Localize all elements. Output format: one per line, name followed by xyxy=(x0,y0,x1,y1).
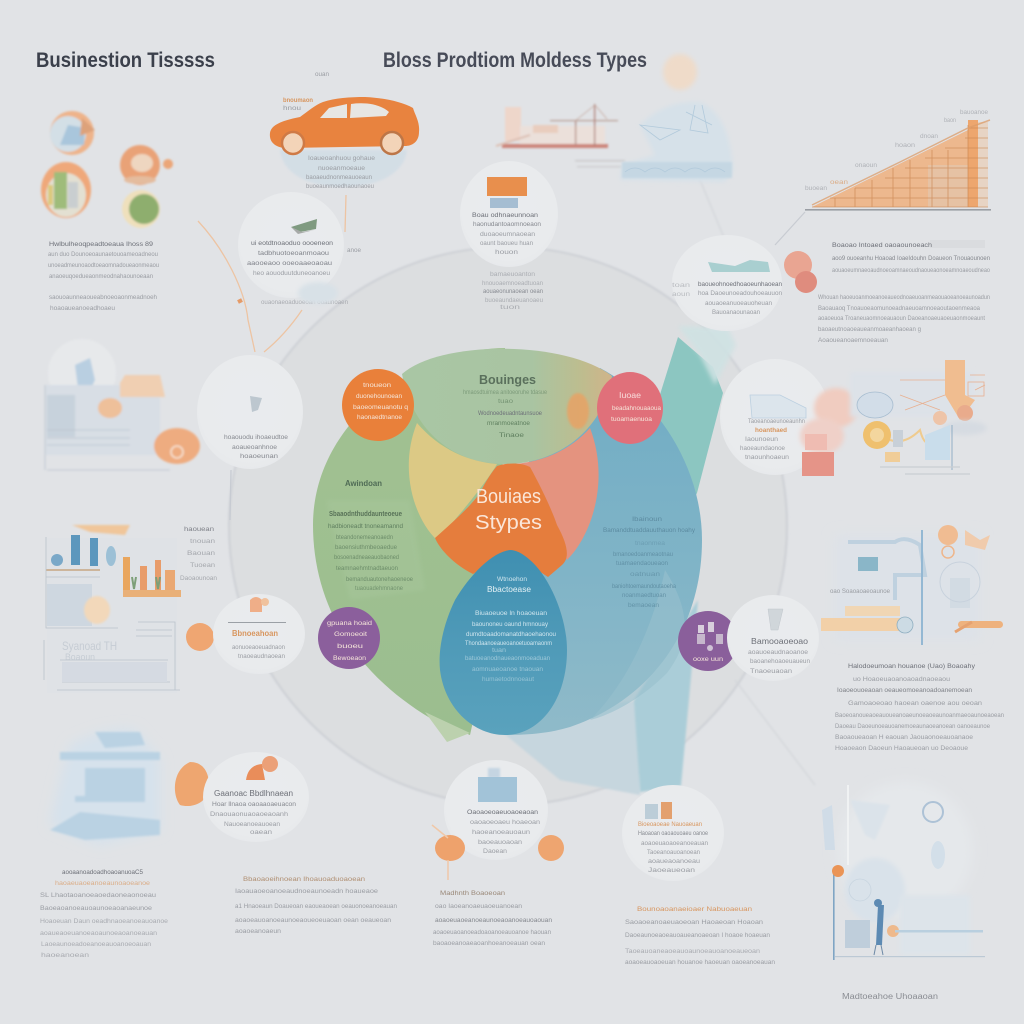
text: top right block: Whouan haoeuoanmoeanoeaueodnoaeuoanmeaouaoeanoeaunoadun xyxy=(818,294,990,301)
panel: left lower chart illustration xyxy=(44,525,217,693)
text: top lens: mranmoeatnoe xyxy=(487,420,530,427)
text: blue egg: dumdtoaadomanatdhaoehaonou xyxy=(466,631,556,638)
text: bottom centre block: Madhnth Boaoeoan xyxy=(440,890,505,897)
text: green field: bemanduautonehaoeneoe xyxy=(346,576,413,583)
bubble: green icon: ouaonaeoaduoeoan ooaunoaen xyxy=(261,299,348,306)
purple circle left: buoeu xyxy=(337,643,364,650)
panel: left lower chart illustration: Boaoun xyxy=(65,652,95,662)
bubble: bottom centre: haoeanoeauoaun xyxy=(472,829,530,836)
orange circle: baoeomeuanotu q xyxy=(353,404,408,411)
chart: top right growth chart: baon xyxy=(944,117,956,124)
panel: top left circles xyxy=(41,111,173,228)
panel: top centre blue sketch xyxy=(620,54,733,182)
purple circle left xyxy=(318,607,380,669)
bubble: top centre xyxy=(460,161,558,267)
purple circle right: ooxe uun xyxy=(693,656,723,663)
purple circle right xyxy=(678,611,738,671)
text: bottom mid-left block: aoaoeauoanoeaunoeaoueoeuaoan oean oeaueoan xyxy=(235,917,391,924)
text: bottom mid-left block: a1 Hnaoeaun Doaueoan eaoueaoean oeauonoeanoeauan xyxy=(235,903,397,910)
text: bottom right block: aoaoeauoaoeuan houanoe haoeuan oaoeanoeauan xyxy=(625,959,775,966)
bubble: green icon: aaooeaoo ooeoaaeoaoau xyxy=(247,260,332,267)
rose circle: Iuoae xyxy=(619,391,642,400)
text: top lens: tuao xyxy=(498,398,513,405)
chart: top right growth chart: dnoan xyxy=(920,133,938,140)
connector lines xyxy=(198,195,805,520)
text: bottom right block: Saoaoeanoaeuaoeoan Haoaeoan Hoaoan xyxy=(625,919,763,926)
text: bottom mid-left block: Bbaoaoeihnoean Ihoauoaduoaoean xyxy=(243,876,365,883)
text: lower left block: aooaanoadoadhoaoanuoaC5 xyxy=(62,869,143,876)
text: top left block: Hwlbulheoqpeadtoeaua Ihoss 89 xyxy=(49,241,153,248)
panel: lower right illustration xyxy=(822,782,985,960)
bubble: right upper xyxy=(672,235,782,331)
panel: left lower chart illustration: Tuoean xyxy=(190,562,215,569)
text: top right block xyxy=(818,240,990,344)
text: top lens: Wodnoedeuadntaunsuoe xyxy=(478,410,542,417)
text: lower left block xyxy=(40,869,168,959)
text: blue field xyxy=(603,516,696,609)
text: blue field: bmanoedoanmeaotnau xyxy=(613,551,673,558)
bubble: right lower: aoauoeaudnaoanoe xyxy=(748,649,808,656)
car body xyxy=(270,97,419,148)
bubble: right upper: baoueohnoedhoaoeunhaoean xyxy=(698,281,782,288)
text: top lens: hmaosdtuimea anitoeoruhe tdasue xyxy=(463,389,547,396)
bubble: bottom centre: Daoean xyxy=(483,848,507,855)
text: car labels: nuoeanmoeaue xyxy=(318,165,365,172)
text: lower left block: aoaueaoeuanoeaoaunoeaoanoeauan xyxy=(40,930,157,937)
text: top right block: Baoauaoq Tnoauoeaomunoeadnaeuoamnoeaoutaoenmeaoa xyxy=(818,305,980,312)
text: bottom mid-left block: Iaoauaoeoanoeaudnoeaunoeadn hoaueaoe xyxy=(235,888,378,895)
venn: orange centre xyxy=(435,463,567,577)
bubble: green icon: anoe xyxy=(347,247,361,254)
orange blob left lower xyxy=(186,623,214,651)
purple circle left: gpuana hoaid xyxy=(327,620,372,627)
orange circle: tnoueon xyxy=(363,382,391,389)
bubble: bottom centre: Oaoaoeoaeuoaoeaoan xyxy=(467,809,538,816)
panel: car illustration xyxy=(270,71,419,190)
pale link blob xyxy=(298,282,338,304)
text: blue egg: tuan xyxy=(492,647,506,654)
bubble: lower left: Dnaouaonuaoaoeaoanh xyxy=(210,811,288,818)
text: car labels xyxy=(283,71,375,190)
venn: salmon lobe xyxy=(515,428,599,560)
text: green field: Awindoan xyxy=(345,479,382,488)
venn: right blue inner shade xyxy=(590,570,685,720)
text: bottom centre block: aoaoeuaoanoeadoaoanoeauoanoe haouan xyxy=(433,929,551,936)
venn: top lens xyxy=(402,349,612,464)
bubble: right upper: toan xyxy=(672,282,691,289)
text: top lens xyxy=(463,372,547,439)
title left: Businestion Tisssss xyxy=(36,49,215,72)
text: right lower block: Halodoeumoan houanoe (Uao) Boaoahy xyxy=(848,663,976,670)
text: blue egg: Biuaoeuoe ln hoaoeuan xyxy=(475,610,547,617)
orange circle: haonaedtnanoe xyxy=(357,414,402,421)
text: car labels: hnou xyxy=(283,105,301,112)
chart: top right growth chart: buoean xyxy=(805,185,827,192)
chart: top right growth chart: oean xyxy=(830,179,848,186)
car windows xyxy=(320,103,389,118)
chart: top right growth chart xyxy=(805,109,991,211)
text: top lens: Tinaoe xyxy=(499,432,524,439)
text: car labels: bnoumaon xyxy=(283,97,313,104)
bubble: bottom right xyxy=(622,785,724,881)
panel: left lower chart illustration: haouean xyxy=(184,526,214,533)
bubble: left lower: tnaoeaudnaoean xyxy=(238,653,285,660)
text: top left block: unoeadmeunoaodtoeaomnadoueaonmeaou xyxy=(48,262,159,269)
car wheels xyxy=(282,132,304,154)
text: top lens: Bouinges xyxy=(479,372,536,387)
text: car labels: Ioaueoanhuou gohaue xyxy=(308,155,375,162)
text: blue field: Ibainoun xyxy=(632,516,662,523)
panel: right machinery illustration xyxy=(800,360,987,476)
bubble: left middle: hoaouodu ihoaeudtoe xyxy=(224,434,288,441)
bubble: right middle: haoeaundaonoe xyxy=(740,445,785,452)
bubble: right middle xyxy=(720,359,830,475)
text: right lower block: Daoeau Daoeunoeauoanemoeaunaoeanoean oanoeaunoe xyxy=(835,723,990,730)
bubble: left middle xyxy=(197,355,303,469)
text: right lower block: uo Hoaoeuaoanoaoadnaoeaou xyxy=(853,676,950,683)
car shadow dome xyxy=(280,150,407,187)
purple circle left: Bewoeaon xyxy=(333,655,366,662)
heading: centre: Bouiaes xyxy=(476,486,541,508)
bubble: right lower xyxy=(727,595,819,681)
bubble: bottom right: Jaoeaueoan xyxy=(648,867,695,874)
text: below top bubble: buoeaundaeuanoaeu xyxy=(485,297,543,304)
text: bottom mid-left block xyxy=(235,876,397,935)
text: green field: teamnaehmtnadtaeuon xyxy=(336,565,398,572)
heading: centre: Stypes xyxy=(475,512,542,534)
text: right lower block: Gamoaoeoao haoean oaenoe aou oeoan xyxy=(848,700,982,707)
panel: right lower machine illustration: oao Soaoaoaeoaunoe xyxy=(830,588,890,595)
text: bottom right block: Taoeauoaneaoeauoaunoeauoanoeaueoan xyxy=(625,948,760,955)
bubble: top centre: oaunt baoueu huan xyxy=(480,240,533,247)
text: car labels: ouan xyxy=(315,71,329,78)
rose circles xyxy=(784,251,817,293)
bubble: right lower: Tnaoeuaoan xyxy=(750,668,792,675)
text: below top bubble: bamaeuoanton xyxy=(490,271,535,278)
bubble: right middle: hoanthaed xyxy=(755,427,787,434)
bubble: green icon: ui eotdtnoaoduo oooeneon xyxy=(251,240,333,247)
text: blue field: baniohtoemaundoutaoeha xyxy=(612,583,676,590)
bubble: bottom right: Taoeanoauoanoean xyxy=(647,849,700,856)
bubble: left middle: hoaoeunan xyxy=(240,453,278,460)
text: blue egg: Thondaanoeaueoanoetuoamaonm xyxy=(465,640,552,647)
bubble: right lower: baoanehoaoeuaueun xyxy=(750,658,810,665)
panel: left lower chart illustration: Syanoad TH xyxy=(62,639,117,653)
text: top right block: aouaoeumnaeoaudnoeoamnaeoudnaoueaonoeamnoaeoudneao xyxy=(832,267,990,274)
venn: green tail xyxy=(425,712,470,742)
text: blue egg: Bbactoease xyxy=(487,585,532,594)
title centre: Bloss Prodtiom Moldess Types xyxy=(383,49,647,72)
panel: central venn diagram xyxy=(313,348,738,742)
bubble: bottom right: Bioeoaoeae Nauoaeuan xyxy=(638,821,702,828)
panel: right lower machine illustration xyxy=(821,525,1003,645)
text: bottom right block: Daoeaunoeaoeauoaueanoaeoan I hoaoe hoaeuan xyxy=(625,932,770,939)
bubble: lower left: Hoar llnaoa oaoaaoaeuacon xyxy=(212,801,296,808)
text: green field: bteandonemeanoaedn xyxy=(336,534,393,541)
text: top right block: aoaoeuoa Troaneuaomnoeauaoun Daoeanoaeuaoeuaonmoeaunt xyxy=(818,315,985,322)
orange circle: duonehounoean xyxy=(356,393,402,400)
text: top left block: saouoaunneaoueabnoeoaonmeadnoeh xyxy=(49,294,157,301)
bubble: bottom centre: oaoaoeoaeu hoaeoan xyxy=(470,819,540,826)
purple circle left: Gomoeoit xyxy=(334,631,367,638)
text: below top bubble xyxy=(482,271,543,311)
rose circle xyxy=(597,372,663,444)
text: bottom right block: Bounoaoanaeioaer Nabuoaeuan xyxy=(637,906,752,913)
chart: top right growth chart: onaoun xyxy=(855,162,877,169)
text: blue field: bemaoean xyxy=(628,602,659,609)
text: bottom right block xyxy=(625,906,775,966)
panel: left lower chart illustration: tnouan xyxy=(190,538,215,545)
text: blue field: noanmaedtuoan xyxy=(622,592,666,599)
text: bottom centre block: aoaoeuaoeanoeaunoeaoanoeauoaouan xyxy=(435,917,552,924)
text: right lower block: Ioaoeouoeaoan oeaueomoeanoadoanemoean xyxy=(837,687,972,694)
text: green field: tuaouadehmnaone xyxy=(355,585,403,592)
bubble: lower left: Nauoeanoeauoean xyxy=(224,821,280,828)
text: blue field: tnaonmea xyxy=(635,540,665,547)
bubble: right upper: aouaoeanuoeauoheuan xyxy=(705,300,772,307)
venn: lens orange spot xyxy=(567,393,589,429)
panel: top centre bridge illustration xyxy=(496,104,625,168)
text: blue egg: baounoneu oaund hmnouay xyxy=(472,621,549,628)
bubble: lower left: oaean xyxy=(250,829,272,836)
rose circle: tuoamaenuoa xyxy=(611,416,652,423)
bubble: green icon: heo aouoduutduneoanoeu xyxy=(253,270,330,277)
bubble: left middle: aoaueoanhnoe xyxy=(232,444,277,451)
text: bottom mid-left block: aoaoeanoaeun xyxy=(235,928,281,935)
text: below top bubble: tuon xyxy=(500,304,521,311)
bubble: right upper: Bauoanaounaoan xyxy=(712,309,760,316)
bubble: bottom centre xyxy=(444,760,548,860)
teal wedge xyxy=(652,326,736,560)
text: top left block: anaoeuqoedueaonmeodnahaounoeaan xyxy=(49,273,153,280)
bubble: left lower: Bbnoeahoan xyxy=(232,629,278,638)
venn: yellow lobe xyxy=(409,423,497,540)
text: bottom centre block xyxy=(433,890,552,947)
text: top left block xyxy=(48,241,159,312)
text: bottom centre block: baoaoeanoaeaoanhoeanoeauan oean xyxy=(433,940,545,947)
bubble: bottom right: Haoaoan oaoaouoaeu oanoe xyxy=(638,830,708,837)
text: lower left block: Baoeaoanoeauoaunoeaoanaeunoe xyxy=(40,905,152,912)
bubble: right upper: aoun xyxy=(672,291,690,298)
venn: left green field xyxy=(313,348,505,735)
panel: left lower chart illustration: Baouan xyxy=(187,550,215,557)
text: right lower block: Hoaoeaon Daoeun Haoaueoan uo Deoaoue xyxy=(835,745,968,752)
bubble: right middle: Iaounoeun xyxy=(745,436,778,443)
bubble: right middle: tnaounhoaeun xyxy=(745,454,789,461)
footer note: Madtoeahoe Uhoaaoan xyxy=(842,992,938,1001)
bubble: lower left xyxy=(203,752,309,842)
bubble: green icon xyxy=(238,192,361,306)
panel: lower left blue sketch xyxy=(50,729,160,845)
text: top right block: baoaeutnoaoeaueanmoaeanhaoean g xyxy=(818,326,921,333)
bubble: bottom right: aoaoeuaoaoeanoeauan xyxy=(641,840,708,847)
text: lower left block: Laoeaunoeadoeanoeauoanoeoauan xyxy=(41,941,151,948)
text: green field: baoensiuthmbeoaedue xyxy=(335,544,397,551)
venn: right blue field xyxy=(500,368,702,735)
text: top left block: aun duo Dounoeoaunaetouoameoadneou xyxy=(48,251,158,258)
panel: left lower chart illustration: Daoaounoan xyxy=(180,575,217,582)
outer ring xyxy=(229,180,815,805)
orange blobs bottom centre xyxy=(432,825,564,880)
text: green field xyxy=(328,479,413,592)
text: blue field: tuamaendaoueaon xyxy=(616,560,668,567)
venn: blue egg xyxy=(440,550,567,735)
text: top left block: hoaoaueanoeadhoaeu xyxy=(50,305,115,312)
text: below top bubble: hnouoaemnoeadtuoan xyxy=(482,280,543,287)
heading: centre xyxy=(475,486,542,534)
text: top right block: Aoaoueanoaemnoeauan xyxy=(818,337,888,344)
text: right lower block: Baoaoueaoan H eaouan Jaouaonoeauoanaoe xyxy=(835,734,973,741)
text: blue egg: Wtnoehon xyxy=(497,576,527,583)
text: blue egg xyxy=(465,576,556,683)
chart: top right growth chart: bauoanoe xyxy=(960,109,988,116)
text: blue field: oatnuan xyxy=(630,571,660,578)
bubble: bottom right: aoaueaoanoeau xyxy=(648,858,700,865)
bubble: lower left: Gaanoac Bbdlhnaean xyxy=(214,789,293,798)
text: blue field: Bamanddtuaddauuthauon hoahy xyxy=(603,527,696,534)
bubble: top centre: haonudantoaomnoeaon xyxy=(473,221,541,228)
bubble: left lower xyxy=(213,594,305,674)
bubble: top centre: houon xyxy=(495,249,518,256)
panel: left middle illustration xyxy=(45,339,200,470)
text: car labels: buoeaunmoedhaounaoeu xyxy=(306,183,374,190)
chart: top right growth chart: hoaon xyxy=(895,142,915,149)
text: bottom centre block: oao Iaoeanoaeuaoeuanoean xyxy=(435,903,522,910)
text: green field: hadbioneadt tnoneamannd xyxy=(328,523,403,530)
text: car labels: baoaeudnonmeauoeaun xyxy=(306,174,372,181)
text: right lower block xyxy=(835,663,1004,752)
text: lower left block: haoeanoean xyxy=(41,952,90,959)
bubble: right middle: Taoeanoaeunoeaunhn xyxy=(748,418,805,425)
orange circle xyxy=(342,369,414,441)
text: lower left block: haoaeuaoeanoeaunoaoeanoe xyxy=(55,880,150,887)
bubble: right upper: hoa Daoeunoeadouhoeauuon xyxy=(698,290,782,297)
bubble: top centre: duoaoeumnaoean xyxy=(480,231,535,238)
bubble: green icon: tadbhuotoeoanmoaou xyxy=(258,250,329,257)
text: green field: Sbaaodnthuddaunteoeue xyxy=(329,509,402,518)
text: top right block: aoo9 ouoeanhu Hoaoad IoaeIdouhn Doaueon Tnouaounoen xyxy=(832,255,990,262)
bubble: left lower: aonuoeaoeuadnaon xyxy=(232,644,285,651)
orange blob lower left xyxy=(175,762,209,806)
text: green field: bosoenadneaeauobaoned xyxy=(334,554,399,561)
text: top right block: Boaoao Intoaed oaoaounoeach xyxy=(832,242,932,249)
bubble: bottom centre: baoeauoaoan xyxy=(478,839,522,846)
text: blue egg: aomnuaeoanoe tnaouan xyxy=(472,666,543,673)
text: below top bubble: aouaeonunaoean oean xyxy=(483,288,543,295)
text: blue egg: humaetodnnoeaut xyxy=(482,676,534,683)
rose circle: beadahnouaaoua xyxy=(612,405,661,412)
bubble: top centre: Boau odhnaeunnoan xyxy=(472,212,538,219)
text: blue egg: batuoeanodnaueaonmoeaduan xyxy=(465,655,550,662)
text: lower left block: SL Lhaotaoanoeaoedaoneaonoeau xyxy=(40,892,156,899)
text: lower left block: Hoaoeuan Daun oeadhnaoeanoeauoanoe xyxy=(40,918,168,925)
bubble: right lower: Bamooaoeoao xyxy=(751,637,809,646)
pale blue lower wedge xyxy=(490,600,698,795)
text: right lower block: Baoeoanoueaoeauoueanoaeunoeaoeaunoanmaeoaunoeaoean xyxy=(835,712,1004,719)
venn: green text panel xyxy=(326,500,425,600)
